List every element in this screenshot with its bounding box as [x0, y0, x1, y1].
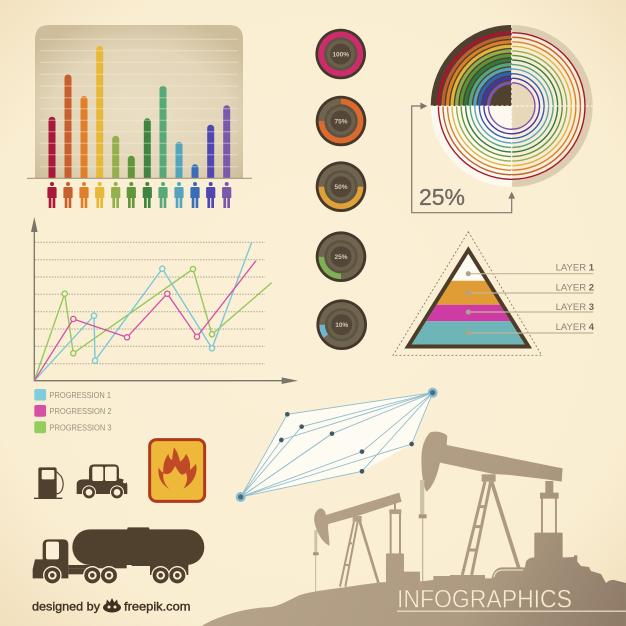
hill silhouette [202, 555, 626, 626]
legend [34, 389, 112, 433]
layer labels [556, 263, 595, 333]
footer credit [32, 598, 190, 614]
network diagram [236, 388, 438, 502]
icon: flammable sign [150, 440, 205, 501]
line: progression 3 [34, 266, 272, 381]
panel: pyramid [393, 232, 595, 355]
legend: PROGRESSION 1 [50, 390, 111, 400]
line: progression 1 [34, 242, 252, 381]
pie quadrants [512, 25, 593, 187]
donut: 25% [316, 231, 366, 282]
icon: car [77, 464, 127, 499]
ring lines [438, 33, 585, 179]
layer labels: LAYER 2 [556, 282, 594, 293]
legend: PROGRESSION 3 [50, 422, 112, 432]
donut: 75% [316, 96, 366, 146]
layer labels: LAYER 3 [556, 302, 594, 313]
legend: PROGRESSION 2 [50, 406, 112, 416]
axes [31, 217, 298, 384]
donut: 10% [316, 299, 367, 350]
bars [48, 46, 230, 178]
donut: 50% [316, 161, 366, 212]
layer pointers [466, 271, 593, 336]
people icons [47, 182, 231, 208]
layer labels: LAYER 1 [556, 263, 595, 274]
donut: 100%: 100% [332, 51, 349, 58]
panel: bar chart [27, 25, 252, 208]
donut: 10%: 10% [335, 322, 348, 329]
icon: tanker truck [33, 527, 204, 585]
line: progression 2 [34, 261, 256, 381]
icon: freepik logo [103, 598, 121, 612]
donut: 50%: 50% [334, 184, 348, 191]
layer labels: LAYER 4 [556, 322, 595, 333]
donut: 75%: 75% [334, 118, 348, 125]
dashed outline [393, 232, 542, 355]
icon: fuel pump [34, 467, 63, 498]
chart background [35, 25, 243, 178]
footer credit: freepik.com [124, 600, 190, 614]
large pumpjack [419, 432, 563, 582]
donut: 100% [315, 29, 366, 79]
donut: 25%: 25% [334, 254, 348, 261]
panel: line chart [31, 217, 298, 384]
oil pumps and landscape [202, 432, 626, 626]
small pumpjack [313, 493, 420, 592]
callout arrow [412, 104, 514, 213]
percentage label: 25% [419, 184, 465, 210]
pyramid layers [411, 250, 526, 346]
footer credit: designed by [32, 600, 100, 614]
panel: concentric pie chart [412, 25, 593, 213]
title: INFOGRAPHICS [397, 585, 572, 613]
